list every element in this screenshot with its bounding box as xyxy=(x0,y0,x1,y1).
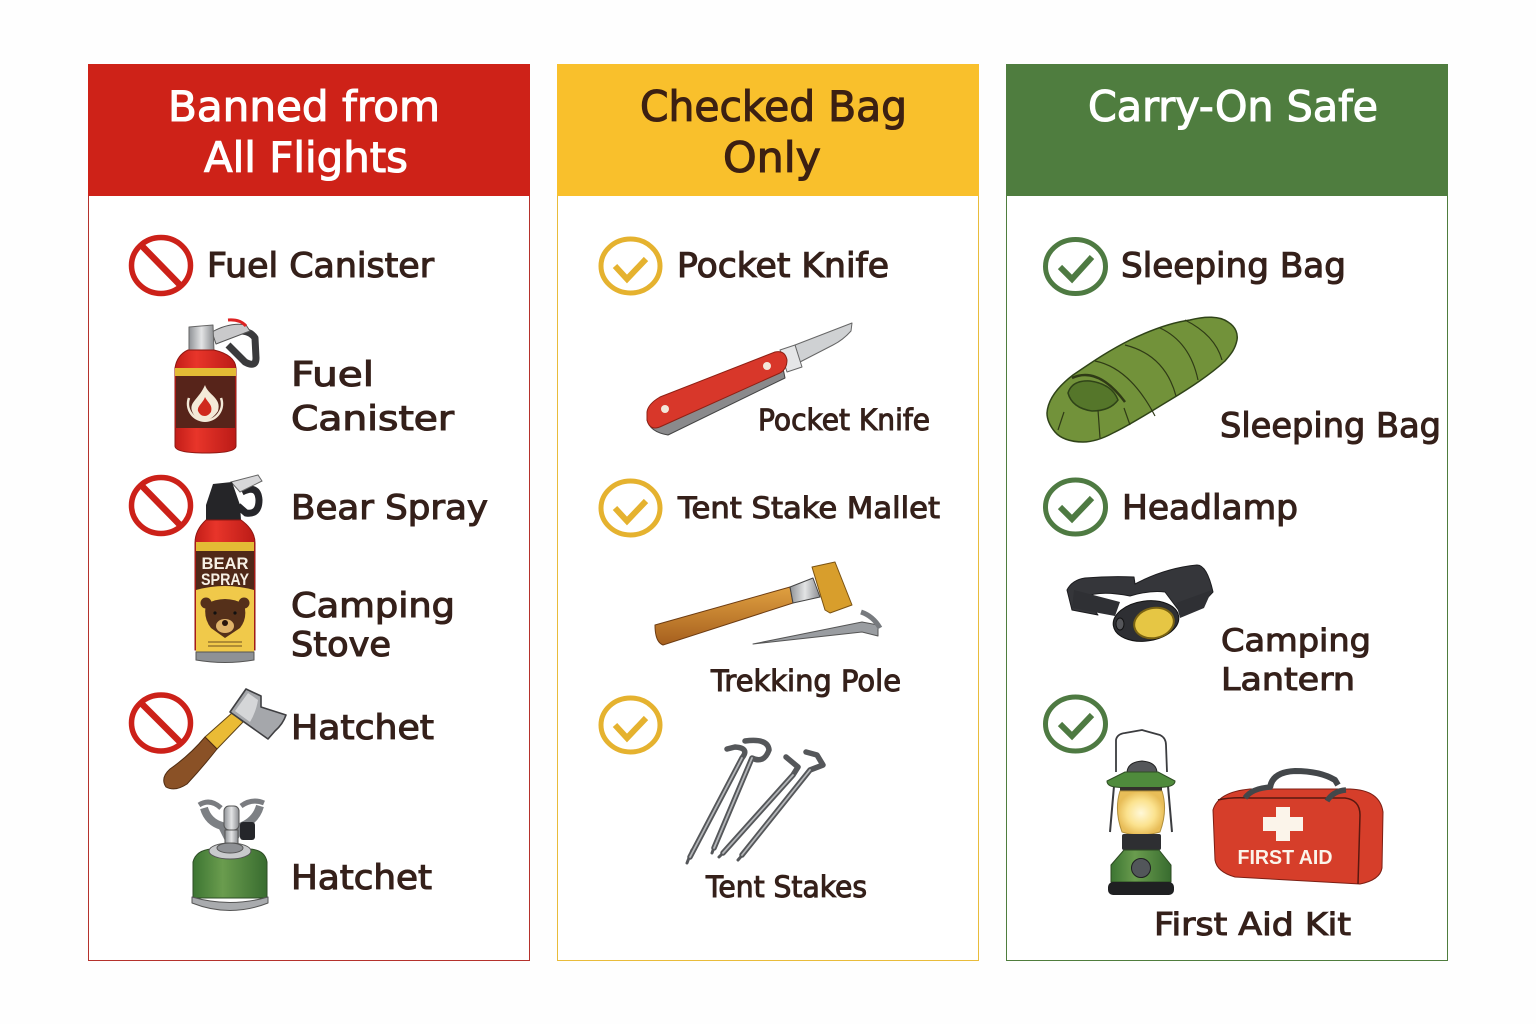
header: carry-on safe: Carry-On Safe xyxy=(1088,82,1378,131)
label: camping stove xyxy=(291,586,455,665)
icon: bear spray can xyxy=(195,475,262,662)
label: headlamp: Headlamp xyxy=(1122,488,1298,528)
label: camping lantern: Lantern xyxy=(1221,662,1355,698)
header: banned from all flights xyxy=(88,64,530,196)
icon: check tent stakes xyxy=(601,698,660,752)
label: camping stove: Stove xyxy=(291,625,391,665)
icon: camping stove xyxy=(192,801,268,910)
icon: tent stakes xyxy=(687,740,823,863)
label: fuel canister: Canister xyxy=(291,399,454,439)
icon: fuel canister xyxy=(175,320,256,453)
label: camping lantern: Camping xyxy=(1221,623,1371,659)
icon: check first aid xyxy=(1046,697,1106,751)
icon: prohibition sign 2 xyxy=(132,478,190,534)
label: sleeping bag heading: Sleeping Bag xyxy=(1121,246,1346,286)
icon: prohibition sign 3 xyxy=(132,695,190,751)
icon: first aid kit xyxy=(1213,771,1383,884)
label: sleeping bag: Sleeping Bag xyxy=(1220,406,1441,446)
label: fuel canister heading: Fuel Canister xyxy=(207,246,434,286)
label: trekking pole: Trekking Pole xyxy=(710,664,901,698)
icon: prohibition sign 1 xyxy=(132,238,190,294)
header: checked bag only: Only xyxy=(723,133,821,182)
label: bear spray: Bear Spray xyxy=(291,488,488,528)
label: hatchet: Hatchet xyxy=(291,708,434,748)
label: first aid kit: First Aid Kit xyxy=(1154,907,1351,943)
icon: check sleeping bag xyxy=(1046,240,1106,294)
label: fuel canister: Fuel xyxy=(291,355,374,395)
label: hatchet stove row: Hatchet xyxy=(291,858,432,898)
icon: check tent stake mallet xyxy=(601,481,660,535)
icon: pocket knife xyxy=(647,323,852,435)
icon: mallet and stake xyxy=(655,562,880,645)
icon: bear spray can: BEAR xyxy=(202,555,249,573)
label: camping lantern xyxy=(1221,623,1371,698)
icon: check headlamp xyxy=(1046,480,1106,534)
icon: check pocket knife xyxy=(601,239,660,293)
label: tent stakes: Tent Stakes xyxy=(705,870,867,904)
icon: headlamp xyxy=(1067,565,1213,645)
label: pocket knife heading: Pocket Knife xyxy=(677,246,889,286)
header: checked bag only xyxy=(557,64,979,196)
icon: camping lantern xyxy=(1107,730,1175,895)
label: fuel canister xyxy=(291,355,454,439)
label: camping stove: Camping xyxy=(291,586,455,626)
icon: first aid kit: FIRST AID xyxy=(1238,847,1332,869)
header: carry-on safe xyxy=(1006,64,1448,196)
header: checked bag only: Checked Bag xyxy=(640,82,907,131)
icon: bear spray can: SPRAY xyxy=(201,571,249,589)
label: pocket knife: Pocket Knife xyxy=(758,403,930,437)
icon: hatchet xyxy=(164,689,286,789)
header: banned from all flights: All Flights xyxy=(204,133,408,182)
panel: carry-on safe xyxy=(1006,64,1448,960)
label: tent stake mallet: Tent Stake Mallet xyxy=(677,491,940,525)
panel: checked bag only xyxy=(557,64,979,960)
panel: banned from all flights xyxy=(88,64,530,960)
icon: sleeping bag xyxy=(1047,317,1237,442)
header: banned from all flights: Banned from xyxy=(168,82,440,131)
